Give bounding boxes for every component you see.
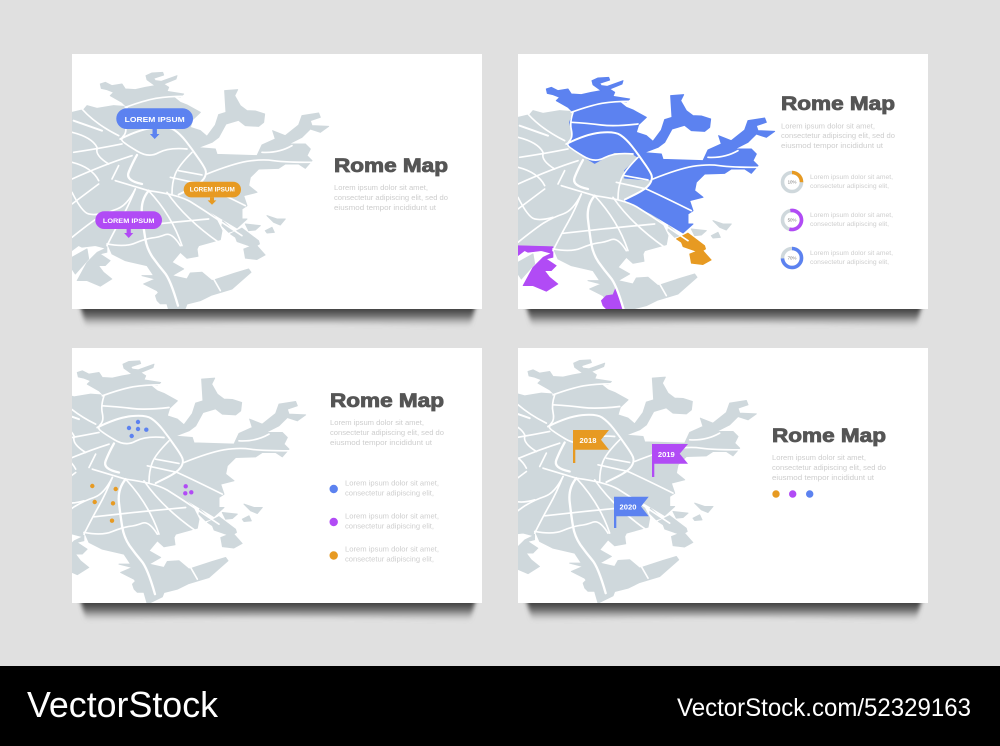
donut text: 70% — [810, 251, 893, 266]
donut text: 50%: consectetur adipiscing elit, — [810, 222, 889, 228]
map: Rome districts — [500, 360, 756, 603]
text block: Lorem ipsum dolor sit amet, — [334, 183, 428, 192]
text block: eiusmod tempor incididunt ut — [781, 141, 883, 150]
donut text: 70%: consectetur adipiscing elit, — [810, 260, 889, 266]
donut: 70% — [782, 248, 802, 268]
legend dots — [772, 490, 813, 498]
map: coloured districts — [518, 77, 775, 321]
flag: 2019: 2019 — [658, 450, 675, 459]
donut text: 10%: consectetur adipiscing elit, — [810, 184, 889, 190]
text block: Lorem ipsum dolor sit amet, — [330, 418, 424, 427]
legend: blue: consectetur adipiscing elit, — [345, 490, 434, 498]
flag: 2020 — [614, 497, 649, 528]
callout: purple pin — [95, 211, 162, 238]
donut text: 10% — [810, 175, 893, 190]
legend: orange: consectetur adipiscing elit, — [345, 556, 434, 564]
text block — [334, 183, 448, 212]
text block: consectetur adipiscing elit, sed do — [772, 463, 886, 472]
text block: consectetur adipiscing elit, sed do — [781, 131, 895, 140]
panel: timeline flags map — [500, 348, 928, 603]
text block: Lorem ipsum dolor sit amet, — [781, 122, 875, 130]
heading: Rome Map — [330, 391, 444, 412]
panel: dot locations map — [49, 348, 482, 604]
legend: purple: consectetur adipiscing elit, — [345, 524, 434, 530]
donut: 10% — [782, 172, 802, 192]
panel: highlighted regions map — [518, 54, 928, 321]
text block: eiusmod tempor incididunt ut — [772, 473, 874, 482]
text block — [781, 122, 895, 150]
text block: consectetur adipiscing elit, sed do — [334, 193, 448, 202]
map: Rome districts — [49, 361, 306, 604]
heading: Rome Map — [772, 426, 886, 447]
text block: eiusmod tempor incididunt ut — [334, 203, 436, 212]
footer bar — [0, 666, 1000, 746]
donut: 70%: 70% — [788, 256, 796, 261]
text block — [330, 418, 444, 447]
donut text: 70%: Lorem ipsum dolor sit amet, — [810, 251, 893, 257]
map: Rome districts — [72, 72, 329, 316]
text block: consectetur adipiscing elit, sed do — [330, 428, 444, 437]
donut: 10%: 10% — [788, 180, 796, 185]
flag: 2020: 2020 — [620, 502, 636, 512]
footer url text: VectorStock.com/52329163 — [677, 694, 971, 722]
legend: blue — [330, 480, 439, 498]
heading: Rome Map — [781, 94, 895, 115]
map dots: blue — [127, 420, 148, 438]
callout: orange pin — [184, 182, 241, 205]
donut text: 50%: Lorem ipsum dolor sit amet, — [810, 213, 893, 219]
legend: purple: Lorem ipsum dolor sit amet, — [345, 514, 439, 520]
legend: blue: Lorem ipsum dolor sit amet, — [345, 480, 439, 488]
legend: purple — [330, 514, 439, 530]
donut: 50% — [781, 209, 803, 231]
callout: blue pin: LOREM IPSUM — [125, 115, 185, 124]
flag: 2018 — [573, 430, 609, 463]
panel shadows — [80, 305, 922, 621]
callout: purple pin: LOREM IPSUM — [103, 218, 155, 225]
map dots: purple — [183, 484, 194, 495]
panel: location labels map — [72, 54, 482, 316]
map dots: orange — [90, 484, 118, 523]
footer logo text: VectorStock — [27, 684, 219, 725]
heading: Rome Map — [334, 156, 448, 177]
flag: 2018: 2018 — [580, 436, 596, 445]
text block: eiusmod tempor incididunt ut — [330, 438, 432, 447]
flag: 2019 — [652, 444, 688, 477]
legend: orange — [330, 546, 439, 564]
donut text: 50% — [810, 213, 893, 228]
callout: blue pin — [116, 108, 193, 139]
donut text: 10%: Lorem ipsum dolor sit amet, — [810, 175, 893, 181]
text block: Lorem ipsum dolor sit amet, — [772, 453, 866, 462]
callout: orange pin: LOREM IPSUM — [190, 188, 235, 194]
text block — [772, 453, 886, 482]
legend: orange: Lorem ipsum dolor sit amet, — [345, 546, 439, 554]
donut: 50%: 50% — [788, 218, 796, 223]
